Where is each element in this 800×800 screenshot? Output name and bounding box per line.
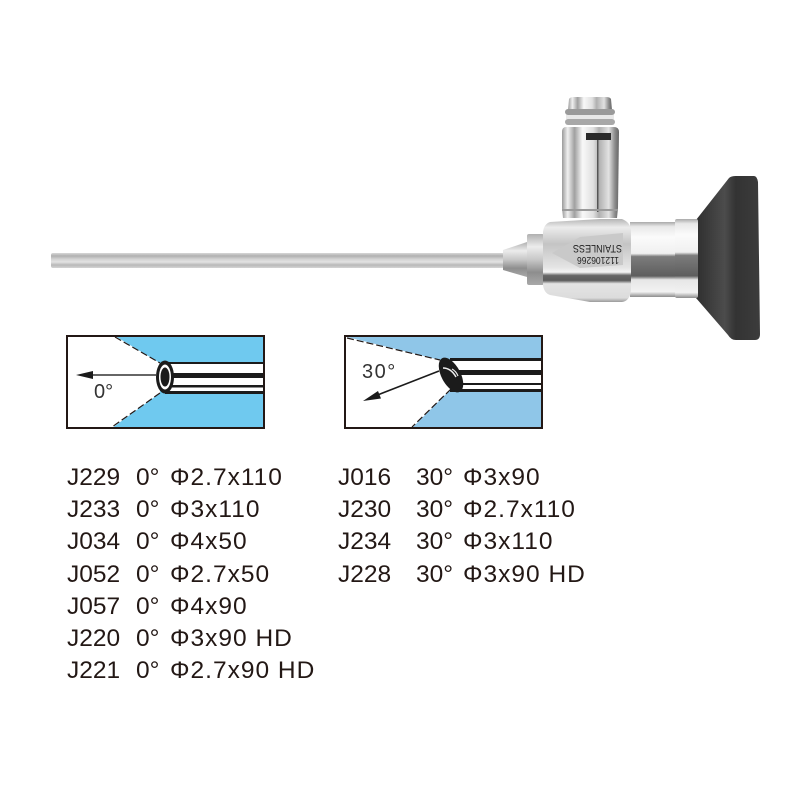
- rear ring: [675, 219, 698, 298]
- model list: 0 degree: J221: [67, 657, 120, 684]
- arrow: [363, 371, 439, 401]
- model list: 0 degree: 0°: [136, 464, 159, 491]
- engraved label plate: [552, 233, 623, 268]
- model list: 30 degree: Φ2.7x110: [463, 496, 576, 523]
- model list: 0 degree: 0°: [136, 657, 159, 684]
- model list: 30 degree: 30°: [416, 561, 453, 588]
- model list: 30 degree: J228: [338, 561, 391, 588]
- model list: 0 degree: 0°: [136, 593, 159, 620]
- model list: 0 degree: J220: [67, 625, 120, 652]
- arrow: [76, 371, 156, 379]
- model list: 0 degree: Φ2.7x50: [170, 561, 270, 588]
- model list: 0 degree: Φ2.7x90 HD: [170, 657, 315, 684]
- light post: [562, 97, 619, 218]
- model list: 30 degree: Φ3x90: [463, 464, 541, 491]
- scope tube: [165, 362, 264, 394]
- rear barrel: [630, 222, 676, 297]
- model list: 0 degree: 0°: [136, 625, 159, 652]
- model list: 30 degree: 30°: [416, 496, 453, 523]
- model list: 30 degree: Φ3x90 HD: [463, 561, 586, 588]
- field of view: [345, 336, 452, 428]
- engraved label plate: STAINLESS: [573, 242, 622, 254]
- panel: 0 degree view diagram: [67, 336, 264, 428]
- scope tube: [450, 358, 542, 392]
- model list: 0 degree: 0°: [136, 528, 159, 555]
- model list: 0 degree: 0°: [136, 561, 159, 588]
- angle label: 0°: [94, 381, 113, 403]
- model list: 30 degree: J016: [338, 464, 391, 491]
- main body: [543, 219, 631, 302]
- model list: 30 degree: J230: [338, 496, 391, 523]
- model list: 0 degree: J034: [67, 528, 120, 555]
- model list: 0 degree: J233: [67, 496, 120, 523]
- scope lens: [156, 360, 174, 394]
- tapered cone tip: [503, 242, 527, 277]
- engraved label plate: 112106266: [577, 254, 619, 266]
- model list: 0 degree: Φ3x90 HD: [170, 625, 293, 652]
- model list: 0 degree: Φ2.7x110: [170, 464, 283, 491]
- eyepiece flange: [696, 176, 760, 340]
- model list: 0 degree: 0°: [136, 496, 159, 523]
- model list: 0 degree: Φ3x110: [170, 496, 260, 523]
- model list: 30 degree: 30°: [416, 464, 453, 491]
- model list: 30 degree: Φ3x110: [463, 528, 553, 555]
- model list: 0 degree: J057: [67, 593, 120, 620]
- rigid shaft: [51, 253, 504, 268]
- model list: 30 degree: [338, 464, 586, 588]
- model list: 30 degree: 30°: [416, 528, 453, 555]
- model list: 0 degree: [67, 464, 315, 684]
- scope lens: [434, 354, 468, 396]
- model list: 0 degree: Φ4x50: [170, 528, 248, 555]
- endoscope illustration: [51, 97, 760, 340]
- collar: [527, 234, 544, 285]
- field of view: [67, 336, 160, 428]
- panel: 30 degree view diagram: [345, 336, 542, 428]
- model list: 0 degree: J052: [67, 561, 120, 588]
- angle label: 30°: [362, 361, 397, 383]
- model list: 30 degree: J234: [338, 528, 391, 555]
- model list: 0 degree: Φ4x90: [170, 593, 248, 620]
- model list: 0 degree: J229: [67, 464, 120, 491]
